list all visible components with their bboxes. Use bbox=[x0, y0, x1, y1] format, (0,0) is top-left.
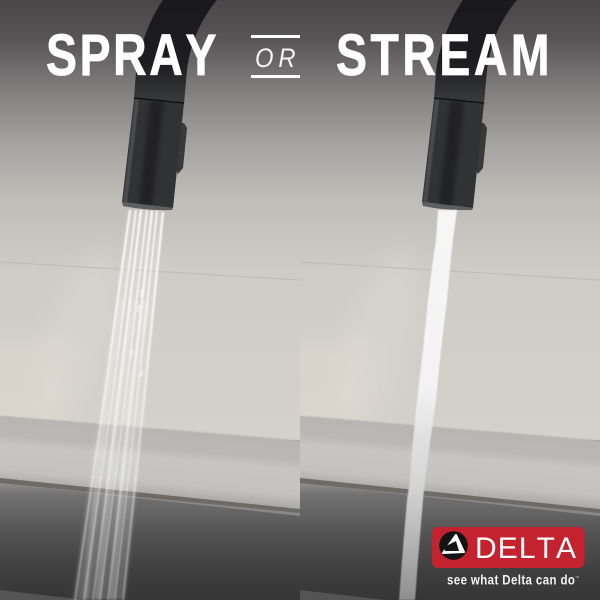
water spray bbox=[73, 210, 164, 600]
faucet spray head bbox=[122, 98, 187, 210]
sink bbox=[300, 483, 600, 600]
title: or: OR bbox=[255, 44, 295, 73]
title: spray: SPRAY bbox=[46, 23, 216, 88]
title: or bbox=[251, 35, 300, 78]
brand logo: see what Delta can do bbox=[447, 571, 575, 588]
counter bbox=[0, 415, 300, 509]
sink bbox=[0, 483, 300, 600]
water stream bbox=[399, 210, 457, 600]
brand logo: DELTA bbox=[475, 532, 576, 565]
brand logo bbox=[432, 527, 584, 588]
faucet stream head bbox=[422, 98, 487, 210]
faucet neck bbox=[434, 0, 517, 104]
faucet neck bbox=[134, 0, 217, 104]
panel: stream scene bbox=[270, 0, 600, 600]
counter bbox=[300, 415, 600, 509]
title: stream: STREAM bbox=[336, 23, 550, 88]
panel: spray scene bbox=[0, 0, 320, 600]
background wall bbox=[0, 0, 300, 440]
brand logo: ™ bbox=[575, 575, 579, 580]
background wall bbox=[300, 0, 600, 440]
